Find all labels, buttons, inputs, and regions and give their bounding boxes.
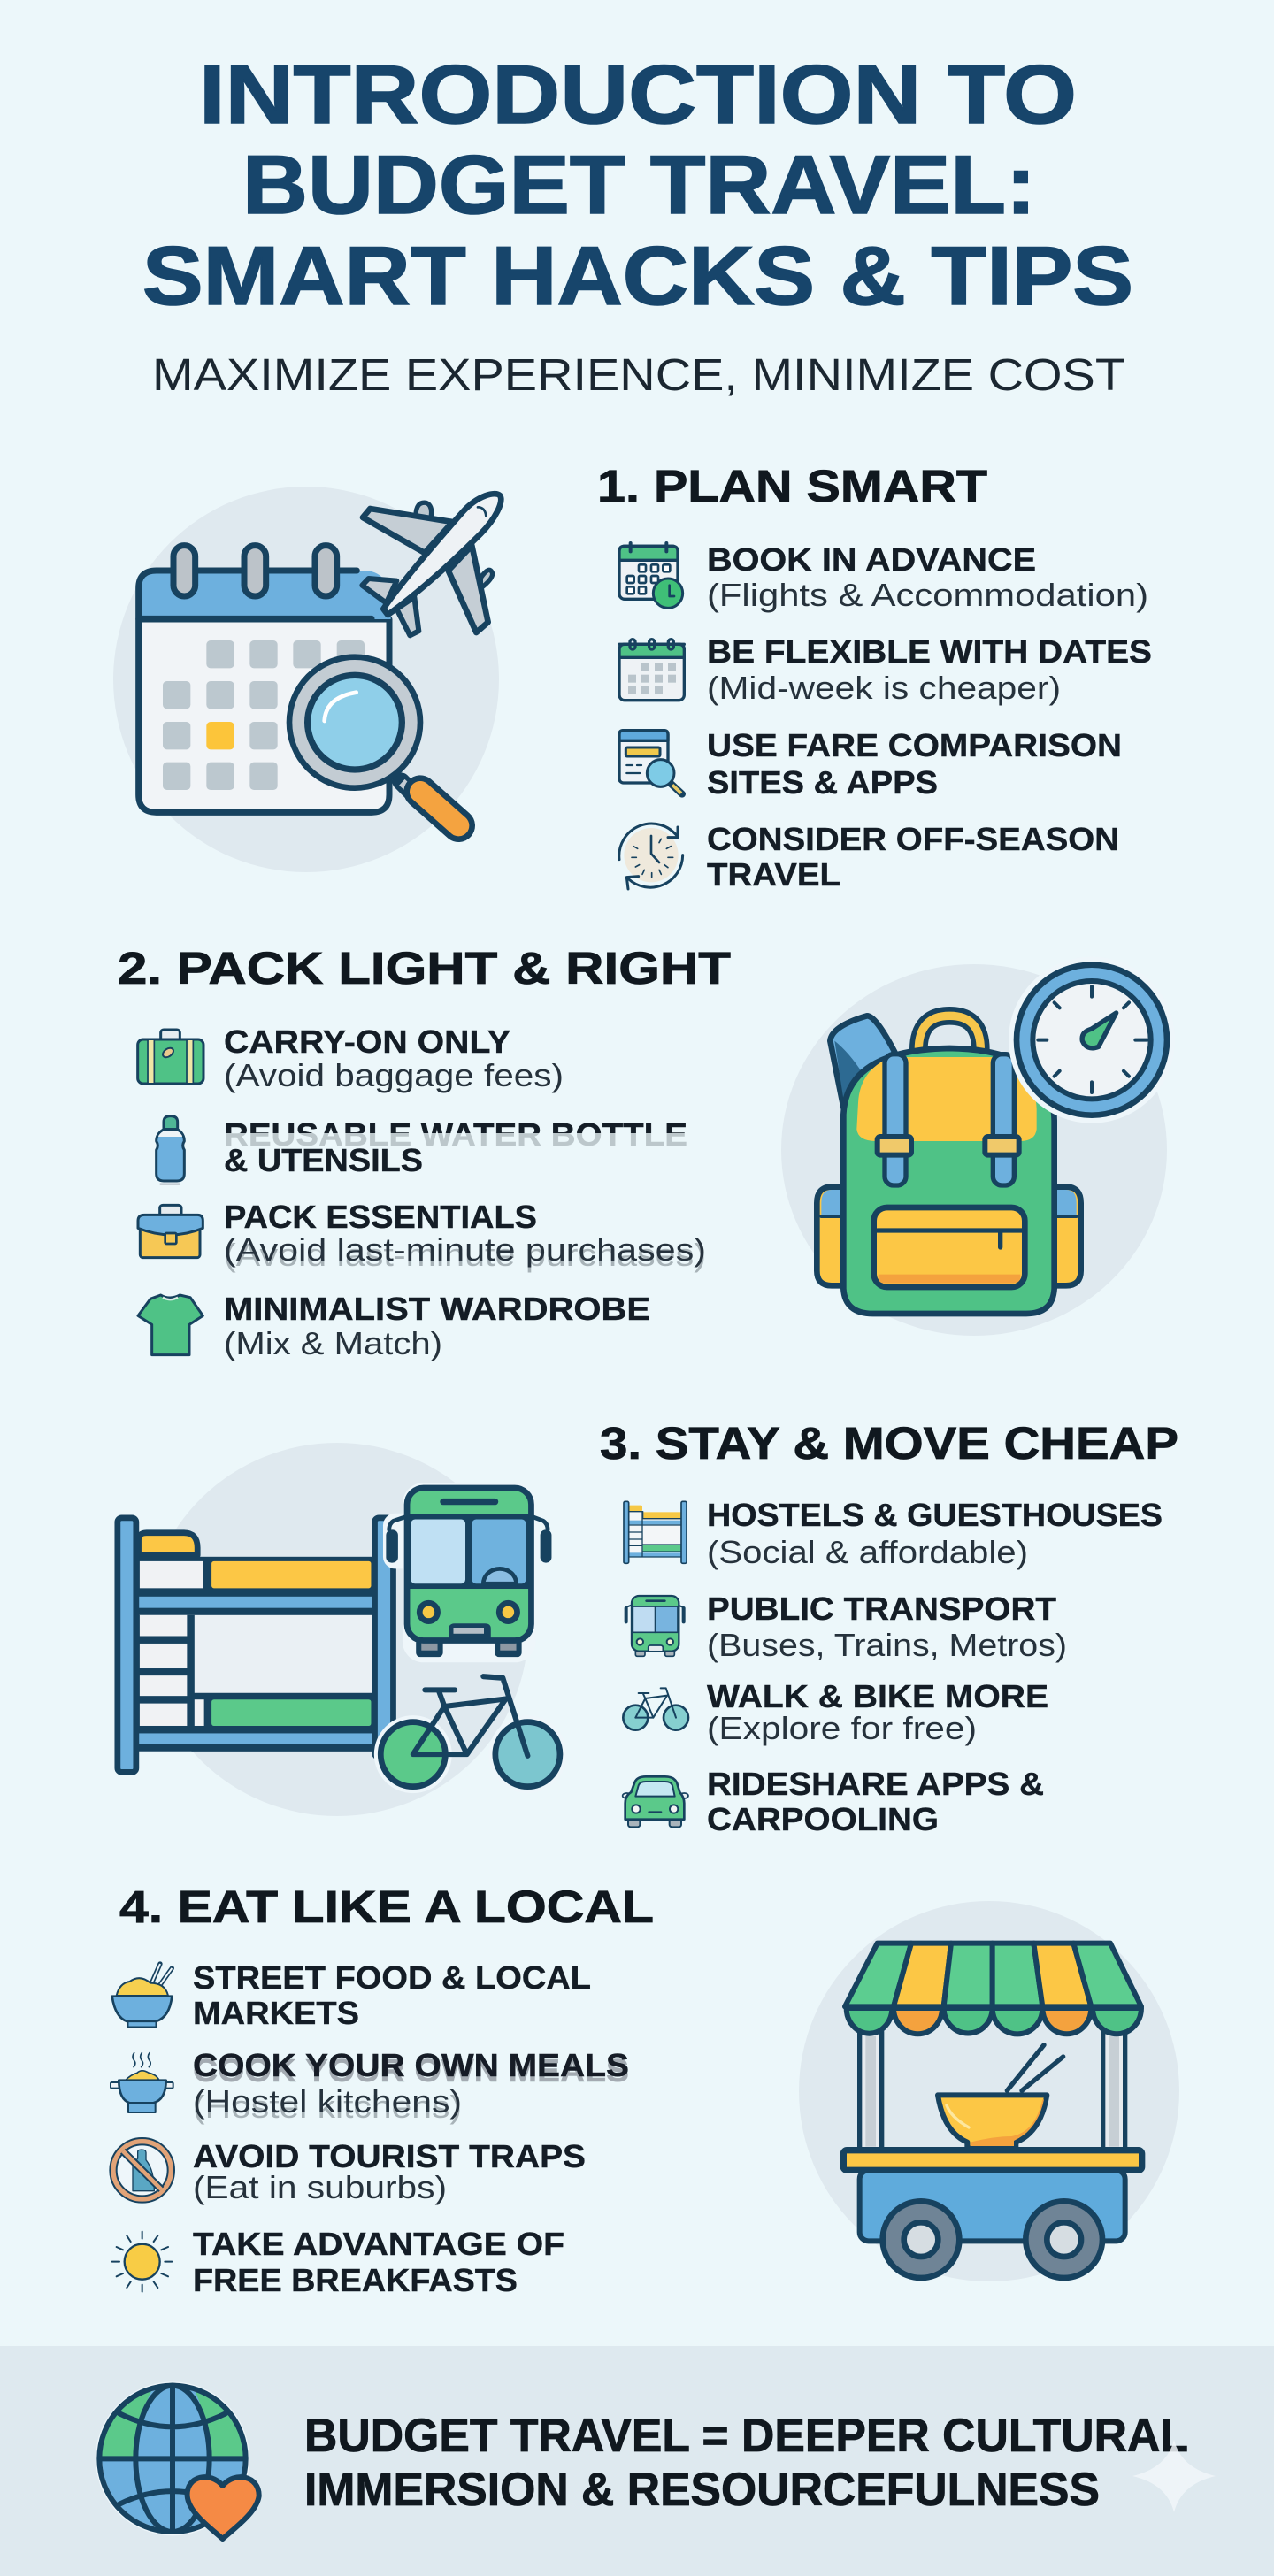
- icon: bunk bed: [624, 1501, 687, 1563]
- text: carry-on only: [224, 1024, 564, 1093]
- text: consider off-season: CONSIDER OFF-SEASON: [707, 821, 1119, 857]
- text: reusable water bottle: [221, 1116, 690, 1178]
- panel: footer conclusion band: [0, 2346, 1274, 2576]
- text: be flexible with dates: (Mid-week is cheaper): [707, 670, 1061, 706]
- text: reusable water bottle: & UTENSILS: [224, 1142, 423, 1178]
- icon: rice bowl: [112, 1964, 172, 2028]
- title: INTRODUCTION TO: [199, 48, 1077, 141]
- heading: 1. plan smart: 1. PLAN SMART: [597, 461, 987, 511]
- text: street food and local markets: STREET FOOD & LOCAL: [193, 1959, 591, 1996]
- icon: t-shirt: [138, 1295, 203, 1355]
- subtitle: MAXIMIZE EXPERIENCE, MINIMIZE COST: [152, 349, 1125, 400]
- text: cook your own meals: (Hostel kitchens): [193, 2083, 462, 2120]
- illustration: street food cart: [799, 1901, 1179, 2281]
- text: minimalist wardrobe: MINIMALIST WARDROBE: [224, 1291, 650, 1327]
- text: walk and bike more: WALK & BIKE MORE: [707, 1678, 1048, 1714]
- text: minimalist wardrobe: [224, 1291, 650, 1361]
- illustration: calendar, plane and magnifier: [113, 487, 501, 872]
- heading: 3. stay and move cheap: 3. STAY & MOVE CHEAP: [600, 1418, 1178, 1468]
- panel: 2 pack light and right: [118, 943, 1175, 1361]
- text: rideshare apps and carpooling: CARPOOLING: [707, 1801, 939, 1837]
- title: BUDGET TRAVEL:: [242, 138, 1036, 231]
- heading: 4. eat like a local: 4. EAT LIKE A LOCAL: [119, 1882, 654, 1932]
- text: cook your own meals: [193, 2047, 629, 2120]
- text: street food and local markets: MARKETS: [193, 1995, 359, 2031]
- text: closing message: BUDGET TRAVEL = DEEPER CULTURAL: [304, 2410, 1188, 2462]
- text: use fare comparison: USE FARE COMPARISON: [707, 727, 1122, 763]
- text: reusable water bottle: REUSABLE WATER BOTTLE: [224, 1116, 687, 1153]
- text: pack essentials: (Avoid last-minute purchases): [224, 1231, 706, 1268]
- text: avoid tourist traps: AVOID TOURIST TRAPS: [193, 2138, 586, 2174]
- text: take advantage of free breakfasts: [193, 2226, 564, 2298]
- text: carry-on only: (Avoid baggage fees): [224, 1057, 564, 1093]
- text: public transport: (Buses, Trains, Metros): [707, 1627, 1067, 1663]
- text: take advantage of free breakfasts: FREE BREAKFASTS: [193, 2262, 518, 2298]
- icon: sparkle: [1132, 2440, 1216, 2512]
- icon: no tourist traps sign: [113, 2142, 171, 2199]
- text: pack essentials: [224, 1199, 706, 1268]
- text: walk and bike more: [707, 1678, 1048, 1746]
- text: book in advance: [707, 541, 1148, 613]
- text: consider off-season: TRAVEL: [707, 856, 840, 893]
- text: avoid tourist traps: (Eat in suburbs): [193, 2169, 447, 2205]
- text: use fare comparison: SITES & APPS: [707, 764, 938, 801]
- text: public transport: PUBLIC TRANSPORT: [707, 1591, 1056, 1627]
- icon: briefcase: [138, 1205, 203, 1258]
- text: rideshare apps and carpooling: RIDESHARE APPS &: [707, 1766, 1044, 1802]
- text: rideshare apps and carpooling: [707, 1766, 1044, 1837]
- icon: off-season clock: [619, 824, 683, 889]
- icon: bus: [625, 1596, 686, 1656]
- text: walk and bike more: (Explore for free): [707, 1710, 977, 1746]
- text: book in advance: (Flights & Accommodation): [707, 577, 1148, 613]
- text: closing message: IMMERSION & RESOURCEFULNESS: [304, 2464, 1100, 2516]
- panel: 3 stay and move cheap: [118, 1418, 1178, 1837]
- heading: 2. pack light and right: 2. PACK LIGHT & RIGHT: [118, 943, 731, 993]
- icon: cooking pot: [111, 2053, 173, 2112]
- panel: 1 plan smart: [113, 461, 1152, 893]
- title: [142, 48, 1133, 322]
- text: hostels and guesthouses: HOSTELS & GUESTHOUSES: [707, 1497, 1163, 1533]
- panel: 4 eat like a local: [111, 1882, 1179, 2298]
- text: hostels and guesthouses: (Social & affordable): [707, 1534, 1028, 1570]
- text: hostels and guesthouses: [707, 1497, 1163, 1570]
- text: pack essentials: PACK ESSENTIALS: [224, 1199, 537, 1235]
- text: closing message: [304, 2410, 1188, 2516]
- text: take advantage of free breakfasts: TAKE ADVANTAGE OF: [193, 2226, 564, 2262]
- title: SMART HACKS & TIPS: [142, 229, 1133, 322]
- icon: globe with heart: [99, 2385, 259, 2539]
- icon: calendar flexible dates: [619, 640, 684, 701]
- text: be flexible with dates: [707, 633, 1152, 706]
- illustration: bunk bed, bus and bicycle: [118, 1443, 566, 1816]
- icon: suitcase: [138, 1030, 203, 1084]
- icon: fare comparison browser: [619, 731, 682, 794]
- text: be flexible with dates: BE FLEXIBLE WITH DATES: [707, 633, 1152, 670]
- icon: calendar with clock: [619, 543, 683, 608]
- text: carry-on only: CARRY-ON ONLY: [224, 1024, 510, 1060]
- text: minimalist wardrobe: (Mix & Match): [224, 1325, 442, 1361]
- text: consider off-season: [707, 821, 1119, 893]
- text: use fare comparison: [707, 727, 1122, 801]
- icon: sun: [112, 2232, 172, 2292]
- icon: car: [623, 1776, 688, 1827]
- text: book in advance: BOOK IN ADVANCE: [707, 541, 1036, 578]
- text: public transport: [707, 1591, 1067, 1663]
- text: street food and local markets: [193, 1959, 591, 2031]
- icon: bicycle: [623, 1688, 688, 1730]
- icon: water bottle: [157, 1116, 184, 1185]
- illustration: backpack and gauge: [781, 957, 1175, 1336]
- text: cook your own meals: COOK YOUR OWN MEALS: [193, 2047, 629, 2083]
- text: avoid tourist traps: [193, 2138, 586, 2205]
